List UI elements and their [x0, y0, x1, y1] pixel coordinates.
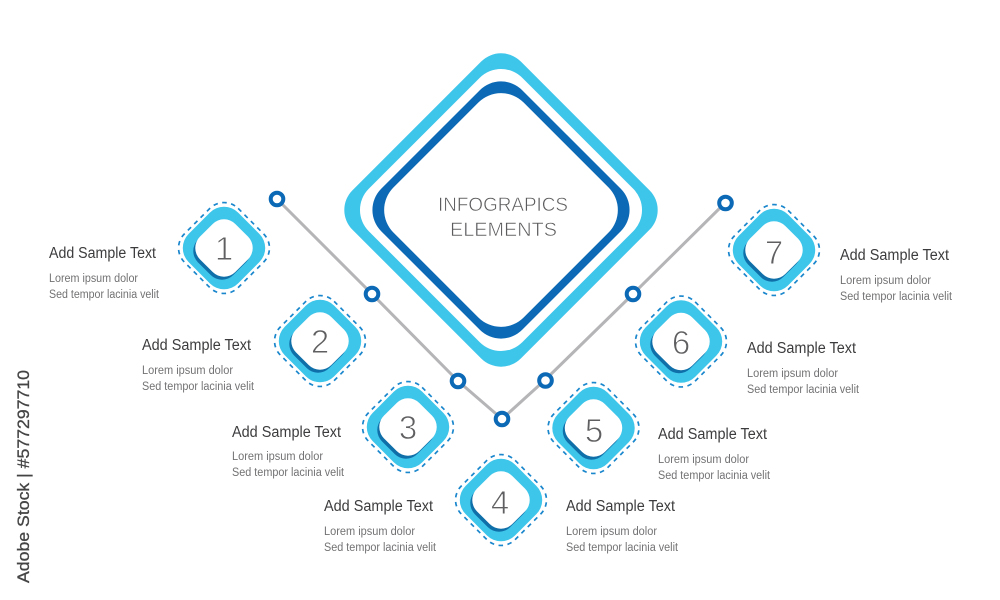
step 2 diamond: 2 — [311, 323, 329, 360]
step 4 right text: Add Sample Text — [566, 498, 676, 515]
step 6 text: Sed tempor lacinia velit — [747, 384, 860, 396]
step 4 diamond: 4 — [491, 484, 509, 521]
step 5 text: Sed tempor lacinia velit — [658, 470, 771, 482]
step 2 text: Sed tempor lacinia velit — [142, 381, 255, 393]
step 1 diamond: 1 — [215, 230, 233, 267]
step 4 left text — [324, 498, 437, 554]
step 7 text: Add Sample Text — [840, 247, 950, 264]
step 6 text — [747, 340, 860, 396]
step 1 text: Lorem ipsum dolor — [49, 273, 138, 285]
step 6 diamond — [627, 288, 735, 395]
step 4 left text: Sed tempor lacinia velit — [324, 542, 437, 554]
step 5 text: Lorem ipsum dolor — [658, 454, 749, 466]
main diamond — [333, 42, 669, 378]
step 3 text: Lorem ipsum dolor — [232, 451, 323, 463]
step 5 diamond: 5 — [585, 412, 603, 449]
title: ELEMENTS — [450, 219, 557, 241]
step 6 text: Lorem ipsum dolor — [747, 368, 838, 380]
step 2 diamond — [266, 287, 374, 395]
step 7 text: Lorem ipsum dolor — [840, 275, 931, 287]
title: INFOGRAPICS — [438, 194, 568, 216]
step 7 diamond — [720, 196, 828, 304]
step 4 diamond — [447, 446, 555, 554]
step 3 diamond: 3 — [399, 409, 417, 446]
step 4 right text: Lorem ipsum dolor — [566, 526, 657, 538]
step 1 text: Add Sample Text — [49, 245, 157, 262]
step 3 diamond — [354, 373, 462, 481]
connector line with nodes — [271, 193, 732, 425]
stock id vertical text: Adobe Stock | #577297710 — [14, 370, 33, 583]
step 6 text: Add Sample Text — [747, 340, 857, 357]
step 3 text — [232, 424, 345, 479]
step 4 right text: Sed tempor lacinia velit — [566, 542, 679, 554]
step 4 left text: Add Sample Text — [324, 498, 434, 515]
step 6 diamond: 6 — [672, 324, 690, 361]
step 7 diamond: 7 — [765, 234, 783, 271]
step 3 text: Add Sample Text — [232, 424, 342, 441]
step 1 text: Sed tempor lacinia velit — [49, 289, 160, 301]
step 1 diamond — [170, 194, 278, 302]
step 5 diamond — [540, 374, 647, 482]
step 3 text: Sed tempor lacinia velit — [232, 467, 345, 479]
step 2 text: Lorem ipsum dolor — [142, 365, 233, 377]
step 1 text — [49, 245, 160, 301]
step 2 text — [142, 337, 255, 393]
step 4 right text — [566, 498, 679, 554]
step 5 text — [658, 426, 771, 482]
step 4 left text: Lorem ipsum dolor — [324, 526, 415, 538]
step 7 text — [840, 247, 953, 303]
step 5 text: Add Sample Text — [658, 426, 768, 443]
step 7 text: Sed tempor lacinia velit — [840, 291, 953, 303]
title — [438, 194, 568, 241]
step 2 text: Add Sample Text — [142, 337, 252, 354]
